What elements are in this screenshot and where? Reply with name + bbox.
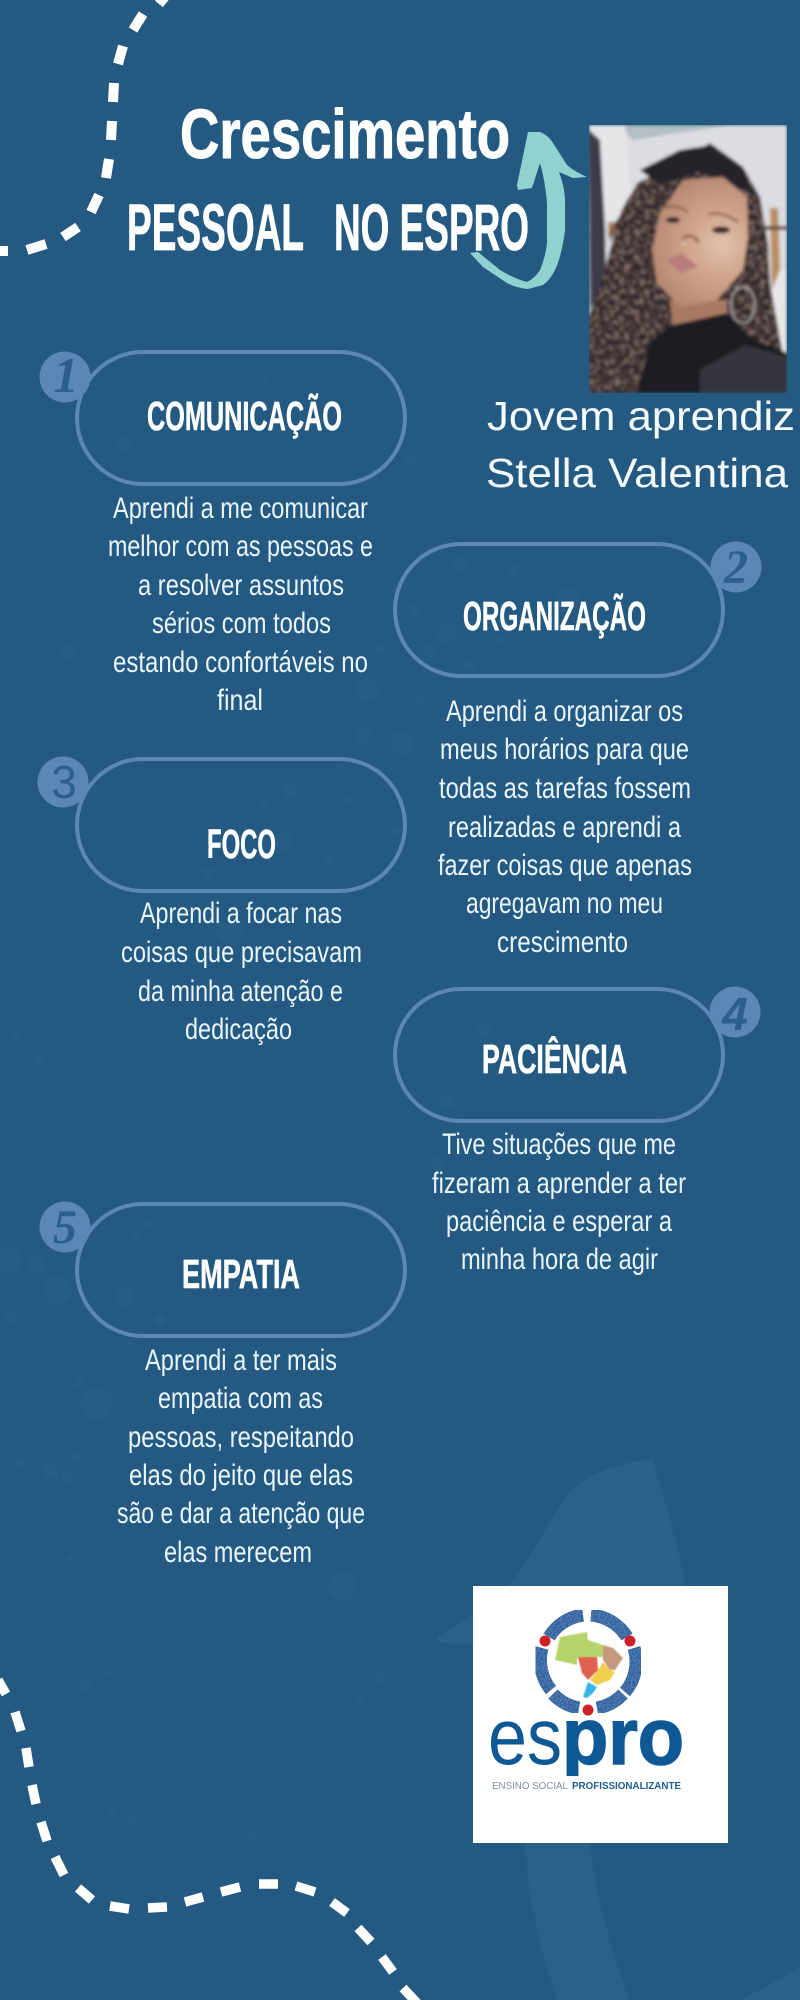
body text: final [217, 684, 263, 717]
panel 3: foco [38, 756, 405, 1046]
background speckles [0, 373, 579, 1840]
body text: Tive situações que me [442, 1128, 676, 1161]
number badge 4 [710, 986, 760, 1040]
dashed path top-left [0, 0, 167, 251]
pill outline [395, 544, 723, 676]
body text: Aprendi a me comunicar [113, 492, 368, 525]
caption line 1: Jovem aprendiz [487, 393, 795, 439]
body text: melhor com as pessoas e [108, 530, 373, 563]
body text: crescimento [497, 926, 628, 959]
title line 1: Crescimento [180, 95, 510, 173]
number badge 5: 5 [53, 1201, 77, 1254]
caption line 2: Stella Valentina [486, 450, 788, 496]
title [127, 95, 529, 264]
body text [121, 897, 362, 1046]
number badge 2: 2 [723, 541, 748, 594]
number badge 2 [710, 541, 762, 594]
logo wordmark [491, 1720, 682, 1776]
logo wordmark: es [488, 1692, 562, 1781]
body text: minha hora de agir [461, 1243, 658, 1276]
pill outline [77, 759, 405, 891]
body text: Aprendi a focar nas [140, 897, 342, 930]
body text [108, 492, 373, 717]
body text: coisas que precisavam [121, 936, 362, 969]
panel 5: empatia [40, 1201, 405, 1569]
logo background [473, 1586, 728, 1843]
background watermark shape [437, 1459, 800, 2000]
title line 2: NO ESPRO [334, 190, 529, 264]
heading: PACIÊNCIA [482, 1036, 627, 1082]
body text: empatia com as [158, 1382, 323, 1415]
number badge 5 [40, 1201, 90, 1254]
number badge 1 [40, 347, 90, 403]
title line 2: PESSOAL [127, 190, 304, 264]
body text: meus horários para que [440, 733, 689, 766]
logo wordmark: pro [562, 1692, 684, 1781]
body text: todas as tarefas fossem [439, 772, 691, 805]
body text [117, 1344, 365, 1569]
logo: espro [473, 1586, 728, 1843]
pill outline [395, 989, 723, 1121]
logo tagline: ENSINO SOCIAL [492, 1780, 568, 1792]
icon: curved arrow [470, 132, 587, 289]
number badge 1: 1 [54, 347, 78, 403]
body text: fazer coisas que apenas [438, 849, 692, 882]
panel 2: organização [395, 541, 762, 959]
body text: Aprendi a organizar os [446, 695, 683, 728]
body text: elas merecem [164, 1536, 312, 1569]
body text [438, 695, 692, 959]
photo: Stella Valentina portrait [589, 125, 787, 393]
body text [432, 1128, 686, 1276]
body text: Aprendi a ter mais [145, 1344, 337, 1377]
logo tagline [492, 1780, 681, 1792]
name caption [486, 393, 795, 496]
pill outline [77, 1204, 405, 1336]
heading: ORGANIZAÇÃO [463, 593, 646, 639]
body text: sérios com todos [152, 607, 331, 640]
body text: são e dar a atenção que [117, 1497, 365, 1530]
number badge 3 [38, 756, 88, 808]
body text: agregavam no meu [466, 887, 663, 920]
body text: estando confortáveis no [113, 646, 368, 679]
dashed path bottom-left [0, 1680, 417, 2000]
body text: elas do jeito que elas [129, 1459, 353, 1492]
body text: dedicação [185, 1013, 292, 1046]
body text: paciência e esperar a [446, 1205, 672, 1238]
body text: da minha atenção e [138, 975, 343, 1008]
logo tagline: PROFISSIONALIZANTE [572, 1780, 681, 1792]
heading: FOCO [207, 821, 276, 867]
heading: COMUNICAÇÃO [147, 393, 342, 439]
number badge 4: 4 [721, 988, 748, 1040]
pill outline [77, 352, 405, 484]
logo Brazil map [555, 1632, 623, 1698]
body text: a resolver assuntos [138, 569, 344, 602]
body text: fizeram a aprender a ter [432, 1167, 686, 1200]
body text: pessoas, respeitando [128, 1421, 354, 1454]
heading: EMPATIA [182, 1251, 300, 1297]
number badge 3: 3 [51, 756, 77, 808]
panel 1: comunicação [40, 347, 405, 717]
body text: realizadas e aprendi a [448, 811, 681, 844]
logo ring [540, 1615, 636, 1716]
panel 4: paciência [395, 986, 760, 1276]
